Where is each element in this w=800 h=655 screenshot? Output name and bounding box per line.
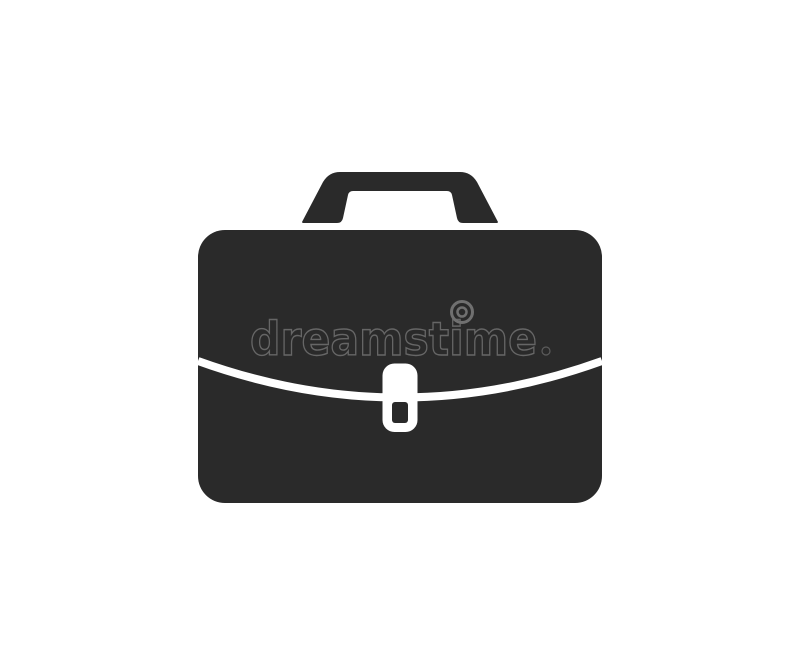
flap line — [198, 361, 602, 398]
clasp — [382, 364, 418, 432]
watermark: dreamstime — [250, 312, 537, 366]
briefcase handle — [302, 172, 498, 223]
briefcase body — [198, 230, 602, 503]
